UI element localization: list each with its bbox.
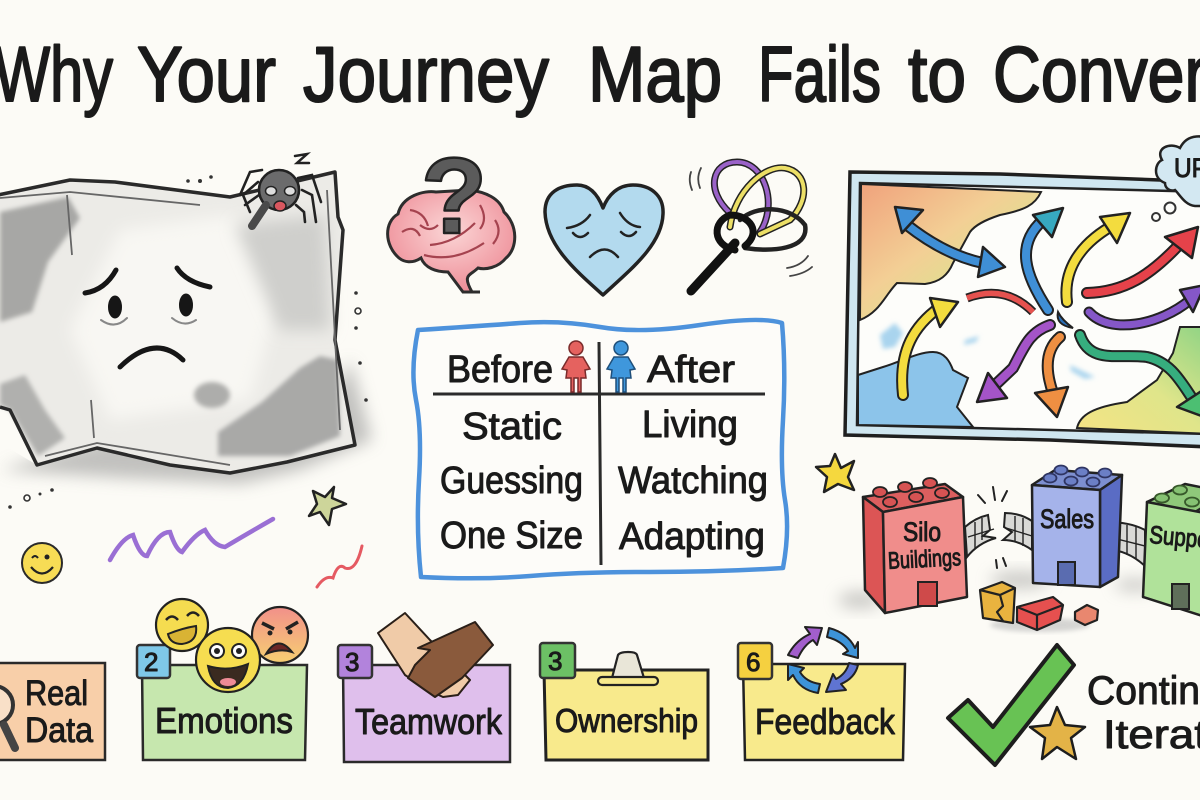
droplet at arrow hub — [1058, 312, 1073, 328]
title: to — [908, 30, 966, 118]
panel: before and after table: Before — [447, 349, 553, 391]
badge: 3: 3 — [345, 647, 359, 677]
card: emotions: Emotions — [155, 700, 293, 741]
icon: handshake — [378, 613, 493, 697]
card: ownership: Ownership — [555, 702, 698, 739]
icon: spider — [240, 154, 321, 226]
icon: smiley — [22, 543, 62, 583]
title: Your — [137, 30, 276, 118]
ground shadows — [838, 572, 1155, 608]
title: Map — [588, 30, 722, 118]
text: continuous iteration — [1087, 669, 1200, 757]
panel: before and after table: One Size — [440, 515, 583, 557]
icon: tangled knot — [690, 162, 812, 291]
illustration: green support building — [1143, 484, 1200, 620]
panel: before and after table: After — [647, 349, 735, 391]
icon: blue figure — [607, 341, 635, 392]
text: continuous iteration: Iterat — [1103, 713, 1200, 757]
arrow: purple right — [1089, 285, 1200, 325]
arrow: red right — [1087, 227, 1198, 293]
icon: yellow star top — [816, 454, 854, 492]
card: teamwork — [338, 613, 510, 762]
card: emotions — [137, 599, 308, 760]
title — [0, 30, 1200, 118]
smudge: bottom left land — [0, 375, 65, 456]
question mark: ? — [421, 135, 487, 256]
card: teamwork: Teamwork — [355, 701, 503, 742]
icon: binder clip — [598, 652, 658, 685]
badge: 3 — [540, 643, 575, 678]
arrow: yellow upward — [1066, 213, 1130, 302]
title: Fails — [758, 30, 881, 118]
text: continuous iteration: Contin — [1087, 669, 1200, 713]
illustration: sad crumpled map — [0, 172, 372, 484]
badge: 2 — [137, 645, 170, 678]
illustration: broken bridges — [965, 487, 1145, 568]
illustration: blue sales building — [1032, 466, 1122, 587]
icon: cycle arrows — [788, 627, 858, 693]
title: Journey — [303, 30, 549, 118]
card: feedback: Feedback — [755, 701, 896, 742]
decorative squiggle: purple — [110, 519, 273, 560]
icon: magnifier — [0, 686, 15, 748]
illustration: red silo building — [863, 478, 967, 613]
arrow: yellow lower left — [902, 298, 958, 395]
arrow: red short — [967, 293, 1033, 312]
land: top left — [860, 184, 1041, 320]
arrow: orange down — [1035, 337, 1068, 417]
panel: before and after table — [413, 320, 787, 578]
illustration: blue sales building: Sales — [1040, 504, 1094, 534]
panel: before and after table: Watching — [618, 460, 768, 502]
icon: red figure — [562, 341, 590, 392]
callout: thought cloud UP — [1152, 136, 1200, 221]
icon: sad blue heart — [545, 185, 663, 295]
panel: colourful living map with arrows — [845, 172, 1200, 447]
badge: 6: 6 — [746, 647, 760, 677]
card: feedback — [738, 627, 905, 760]
arrow: teal upward — [1026, 208, 1063, 310]
arrow: blue double — [895, 207, 1005, 277]
panel: before and after table: Guessing — [440, 460, 583, 502]
illustration: red silo building: Buildings — [887, 544, 962, 575]
icon: angry emoji — [252, 607, 308, 663]
arrow: green right — [1080, 335, 1200, 422]
icon: laughing emoji — [156, 599, 208, 651]
illustration: red silo building: Silo — [903, 517, 941, 547]
decorative dots — [8, 175, 368, 509]
decorative squiggle: red — [317, 546, 362, 587]
panel: before and after table: Living — [642, 404, 738, 446]
arrow: purple down — [977, 325, 1050, 402]
illustration: scattered toy blocks — [980, 582, 1098, 632]
icon: brain with question mark — [388, 135, 515, 292]
badge: 6 — [738, 643, 772, 679]
card: ownership — [540, 643, 708, 760]
badge: 2: 2 — [144, 647, 158, 677]
panel: before and after table: Adapting — [619, 516, 765, 558]
icon: gold star — [1030, 707, 1085, 759]
badge: 3: 3 — [548, 646, 562, 676]
smudge: top left land — [0, 197, 80, 322]
card: real data — [0, 663, 105, 760]
land: bottom right — [1077, 327, 1200, 434]
icon: green check mark — [948, 645, 1074, 765]
card: real data: Data — [25, 711, 93, 750]
icon: excited emoji — [196, 628, 260, 692]
panel: before and after table: Static — [462, 406, 562, 448]
face — [85, 268, 210, 367]
land: bottom left — [858, 352, 973, 427]
smudge: bottom right land — [218, 356, 340, 456]
card: real data: Real — [25, 674, 88, 713]
icon: small green star — [309, 487, 346, 525]
badge: 3 — [338, 645, 372, 678]
